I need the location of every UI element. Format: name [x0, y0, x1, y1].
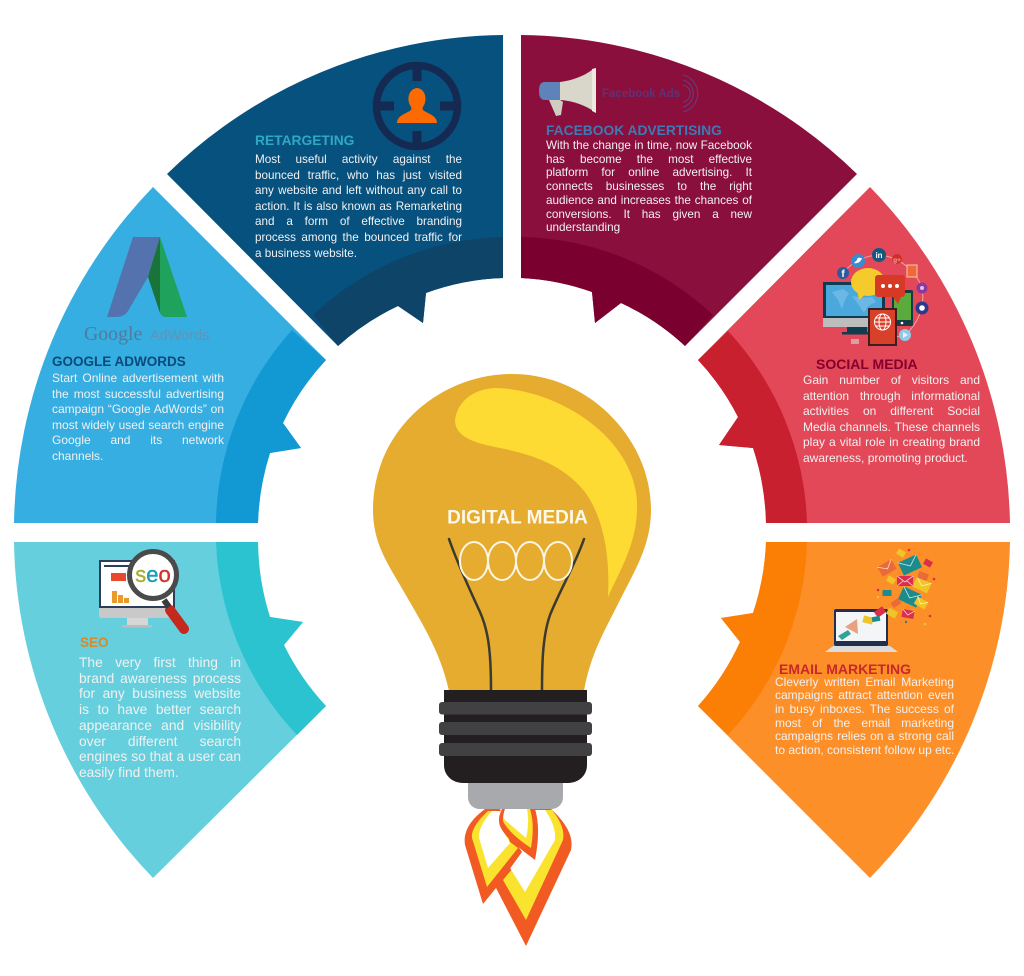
light bulb with rocket flames — [373, 374, 651, 946]
text: facebook advertising — [546, 139, 752, 234]
inner band: social media — [698, 331, 807, 523]
icon: flying envelopes — [862, 548, 935, 625]
text: seo: appearance and visibility — [79, 718, 241, 733]
panel shape: seo — [14, 542, 326, 878]
title: digital media: DIGITAL MEDIA — [447, 508, 588, 528]
text: email marketing: to action, consistent follow up etc. — [775, 743, 954, 757]
text: social media: awareness, promoting product. — [803, 451, 968, 465]
panel shape: email marketing — [698, 542, 1010, 878]
text: google adwords — [52, 371, 224, 463]
bulb screw base — [439, 690, 592, 783]
icon: social media devices: in — [875, 251, 883, 260]
text: email marketing: campaigns attract attention even — [775, 688, 954, 702]
icon: laptop with megaphone — [825, 609, 898, 652]
text: retargeting: any website and left without any call to — [255, 184, 462, 197]
bulb glass — [373, 374, 651, 691]
icon: target with person — [376, 66, 458, 146]
icon: seo monitor and magnifier: seo — [135, 562, 171, 587]
inner band: retargeting — [313, 237, 503, 346]
text: social media: Media channels. These channels — [803, 420, 980, 434]
text: social media: attention through informational — [803, 389, 980, 403]
icon: social media devices — [823, 248, 928, 346]
text: email marketing — [775, 674, 954, 757]
inner band: email marketing — [698, 542, 807, 735]
text: seo: brand awareness process — [79, 671, 241, 686]
inner band: facebook advertising — [521, 237, 713, 346]
text: google adwords: most widely used search engine — [52, 418, 224, 432]
icon label: facebook ads — [602, 75, 698, 112]
text: email marketing: campaigns relies on a strong call — [775, 729, 954, 743]
panel shape: retargeting — [167, 35, 503, 346]
panel shape: social media — [698, 187, 1010, 523]
panel: facebook advertising — [521, 35, 857, 346]
text: google adwords: Start Online advertisement with — [52, 371, 224, 385]
text: retargeting: and a form of effective branding — [255, 215, 462, 228]
text: seo — [79, 655, 241, 780]
text: google adwords: the most successful advertising — [52, 387, 224, 401]
bulb base nozzle — [468, 780, 563, 809]
inner band: seo — [216, 542, 326, 735]
text: facebook advertising: platform for online advertising. It — [546, 166, 752, 179]
text: retargeting: process among the bounced traffic for — [255, 231, 462, 244]
flames — [465, 808, 572, 946]
panel shape: google adwords — [14, 187, 326, 523]
text: social media — [803, 373, 980, 465]
panel: email marketing — [698, 542, 1010, 878]
text: retargeting: action. It is also known as Remarketing — [255, 200, 462, 213]
icon label: facebook ads: Facebook Ads — [602, 88, 680, 100]
text: facebook advertising: understanding — [546, 221, 620, 234]
icon label: google adwords: AdWords — [150, 328, 209, 344]
text: seo: easily find them. — [79, 765, 179, 780]
text: retargeting — [255, 153, 462, 260]
icon: social media devices: f — [841, 269, 845, 280]
text: seo: over different search — [79, 734, 241, 749]
text: google adwords: channels. — [52, 449, 103, 463]
heading: retargeting: RETARGETING — [255, 133, 354, 148]
text: facebook advertising: audience and increases the chances of — [546, 194, 752, 207]
bulb filament coils — [460, 542, 572, 580]
icon: adwords logo — [107, 237, 187, 317]
panel: seo — [14, 542, 326, 878]
heading: google adwords: GOOGLE ADWORDS — [52, 354, 186, 369]
text: facebook advertising: conversions. It has given a new — [546, 208, 752, 221]
text: facebook advertising: has become the most effective — [546, 153, 752, 166]
icon label: google adwords — [84, 323, 209, 345]
text: social media: Gain number of visitors and — [803, 373, 980, 387]
text: facebook advertising: With the change in time, now Facebook — [546, 139, 752, 152]
heading: email marketing: EMAIL MARKETING — [779, 661, 911, 677]
heading: seo: SEO — [80, 635, 109, 650]
heading: facebook advertising: FACEBOOK ADVERTISING — [546, 123, 722, 138]
text: email marketing: Cleverly written Email Marketing — [775, 674, 954, 688]
text: seo: The very first thing in — [79, 655, 241, 670]
panel: social media — [698, 187, 1010, 523]
text: google adwords: campaign “Google AdWords” on — [52, 402, 224, 416]
text: email marketing: in busy inboxes. The success of — [775, 702, 954, 716]
text: retargeting: a business website. — [255, 247, 357, 260]
panel: retargeting — [167, 35, 503, 346]
text: google adwords: Google and its network — [52, 433, 224, 447]
text: retargeting: Most useful activity against the — [255, 153, 462, 166]
inner band: google adwords — [216, 330, 326, 523]
panel shape: facebook advertising — [521, 35, 857, 346]
heading: social media: SOCIAL MEDIA — [816, 356, 918, 372]
text: seo: engines so that a user can — [79, 749, 241, 764]
text: email marketing: most of the email marketing — [775, 716, 954, 730]
bulb highlight — [455, 388, 637, 597]
text: facebook advertising: connects businesses to the right — [546, 180, 752, 193]
icon: megaphone — [539, 68, 596, 116]
text: seo: for any business website — [79, 686, 241, 701]
icon: social media devices: g+ — [893, 257, 901, 264]
text: social media: play a vital role in creating brand — [803, 435, 980, 449]
text: seo: is to have better search — [79, 702, 241, 717]
bulb filament wires — [449, 539, 584, 690]
panel: google adwords — [14, 187, 326, 523]
text: social media: activities on different Social — [803, 404, 980, 418]
text: retargeting: bounced traffic, who has just visited — [255, 169, 462, 182]
icon: seo monitor and magnifier — [99, 552, 184, 629]
icon label: google adwords: Google — [84, 323, 142, 345]
